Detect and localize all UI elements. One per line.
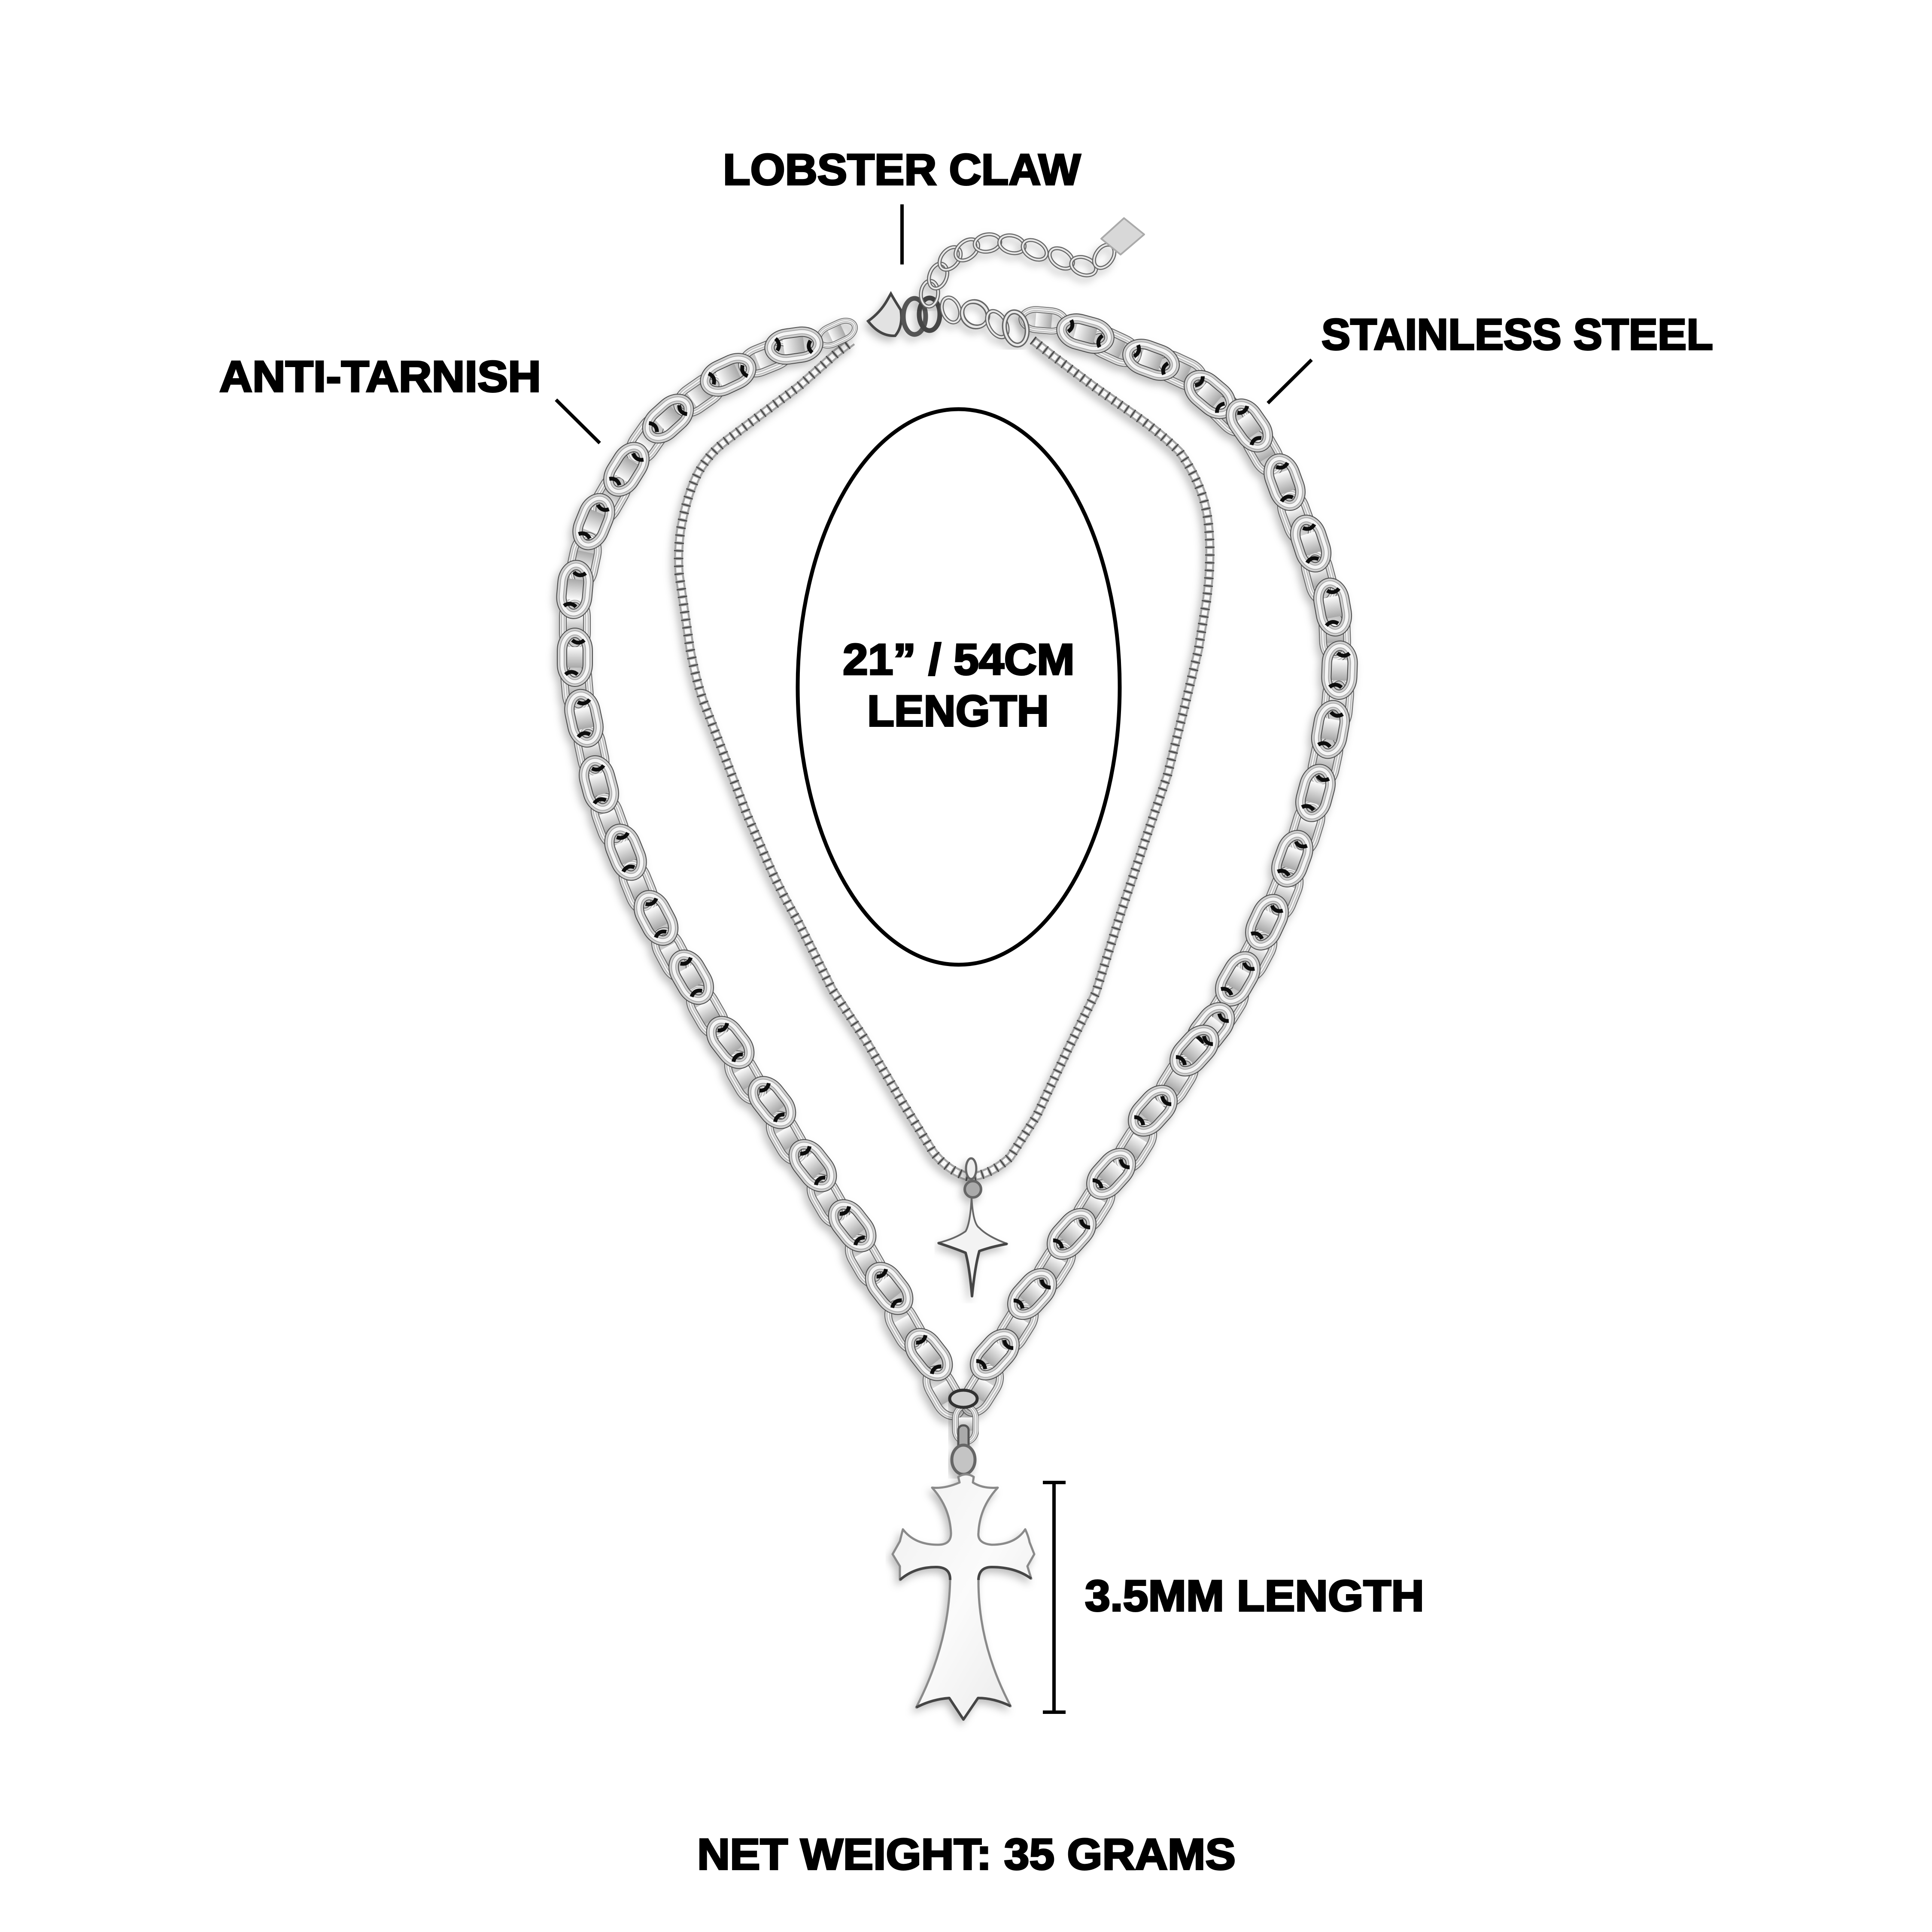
callout: stainless steel: STAINLESS STEEL xyxy=(1321,310,1713,359)
heavy cable chain xyxy=(560,308,1353,1421)
callout: chain length: LENGTH xyxy=(867,687,1049,735)
icon: extender tag xyxy=(1101,218,1144,255)
right side back links xyxy=(958,308,1352,1418)
callout: lobster claw: LOBSTER CLAW xyxy=(723,145,1081,194)
cross pendant xyxy=(893,1474,1034,1719)
circumference ellipse xyxy=(798,409,1120,965)
fine box chain xyxy=(679,340,1210,1177)
left side back links xyxy=(563,317,967,1421)
callout: anti-tarnish xyxy=(219,352,600,443)
callout: pendant length: 3.5MM LENGTH xyxy=(1085,1571,1424,1620)
right side front links xyxy=(969,315,1353,1381)
callout: chain length xyxy=(843,635,1075,735)
extender chain xyxy=(920,232,1119,307)
lobster claw clasp and small rings xyxy=(868,294,1030,347)
callout: anti-tarnish: ANTI-TARNISH xyxy=(219,352,541,401)
callout: chain length: 21” / 54CM xyxy=(843,635,1075,684)
callout: stainless steel xyxy=(1268,310,1713,403)
dimension bracket: pendant length xyxy=(1043,1482,1066,1712)
small star pendant xyxy=(938,1158,1007,1296)
cross connector links xyxy=(950,1390,977,1474)
callout: net weight: NET WEIGHT: 35 GRAMS xyxy=(697,1830,1236,1879)
left side front links xyxy=(560,329,954,1382)
